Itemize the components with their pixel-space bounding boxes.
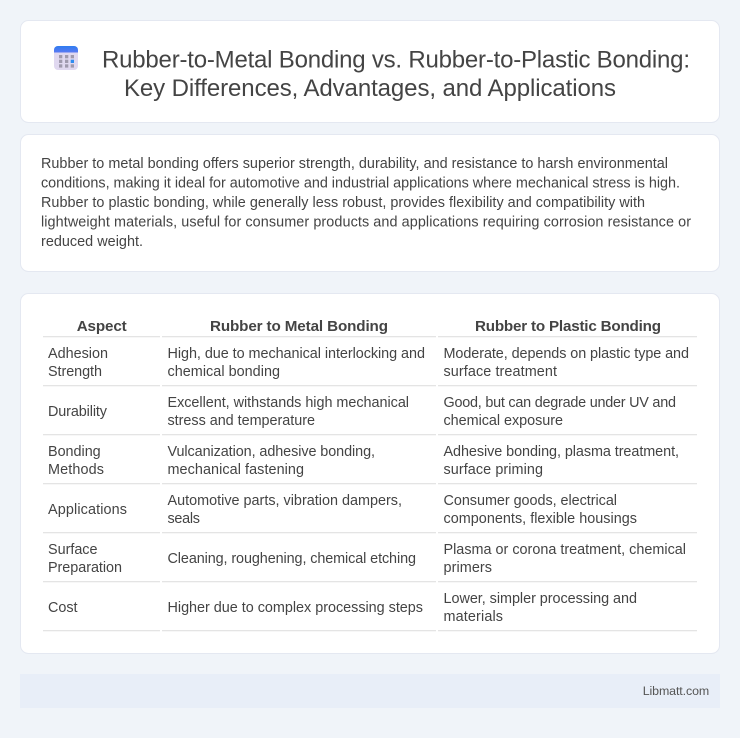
row: bonding methods — [48, 444, 679, 478]
title: Key Differences, Advantages, and Applications — [124, 75, 616, 102]
table header — [77, 318, 661, 335]
row: adhesion strength: surface treatment — [444, 364, 557, 380]
footer credit: Libmatt.com — [643, 684, 709, 698]
row: cost: Cost — [48, 600, 78, 616]
row: bonding methods: Bonding — [48, 444, 101, 460]
row: bonding methods: surface priming — [444, 462, 543, 478]
row: surface preparation: Plasma or corona treatment, chemical — [444, 542, 686, 558]
row: applications: components, flexible housings — [444, 511, 637, 527]
table header: Rubber to Metal Bonding — [210, 318, 388, 335]
row: adhesion strength: chemical bonding — [168, 364, 280, 380]
row: durability: chemical exposure — [444, 413, 563, 429]
row: applications: Automotive parts, vibration dampers, — [168, 493, 402, 509]
intro panel — [20, 134, 720, 272]
row: durability: Durability — [48, 404, 108, 420]
intro text: Rubber to metal bonding offers superior strength, durability, and resistance to harsh environmental — [41, 156, 668, 172]
row: adhesion strength: Strength — [48, 364, 102, 380]
intro text: reduced weight. — [41, 234, 143, 250]
intro text — [41, 156, 691, 250]
row: surface preparation: Surface — [48, 542, 98, 558]
title: Rubber-to-Metal Bonding vs. Rubber-to-Plastic Bonding: — [102, 46, 690, 74]
footer — [20, 674, 720, 708]
intro text: conditions, making it ideal for automotive and industrial applications where mechanical stress is high. — [41, 176, 680, 192]
row: applications: Consumer goods, electrical — [444, 493, 617, 509]
table header: Rubber to Plastic Bonding — [475, 318, 661, 335]
title — [102, 46, 690, 102]
row: cost: Higher due to complex processing steps — [168, 600, 423, 616]
row: applications: Applications — [48, 502, 127, 518]
row: cost: Lower, simpler processing and — [444, 591, 637, 607]
row: bonding methods: mechanical fastening — [168, 462, 304, 478]
comparison table panel — [20, 294, 720, 654]
row: bonding methods: Adhesive bonding, plasma treatment, — [444, 444, 679, 460]
row: surface preparation: primers — [444, 560, 492, 576]
row: durability: Excellent, withstands high mechanical — [168, 395, 409, 411]
row: adhesion strength: High, due to mechanical interlocking and — [168, 346, 425, 362]
icon: calendar — [54, 46, 78, 70]
row: durability: stress and temperature — [168, 413, 315, 429]
row: durability — [48, 395, 676, 429]
intro text: lightweight materials, useful for consumer products and applications requiring corrosion resistance or — [41, 214, 691, 230]
row: applications — [48, 493, 637, 527]
row: bonding methods: Vulcanization, adhesive bonding, — [168, 444, 375, 460]
row: surface preparation: Cleaning, roughening, chemical etching — [168, 551, 416, 567]
row: adhesion strength: Moderate, depends on plastic type and — [444, 346, 689, 362]
row: surface preparation — [48, 542, 686, 576]
header panel — [20, 20, 720, 122]
intro text: Rubber to plastic bonding, while generally less robust, provides flexibility and compatibility with — [41, 195, 645, 211]
row: surface preparation: Preparation — [48, 560, 122, 576]
row: applications: seals — [168, 511, 200, 527]
row: adhesion strength — [48, 346, 689, 380]
row: bonding methods: Methods — [48, 462, 104, 478]
table header: Aspect — [77, 318, 127, 335]
row: adhesion strength: Adhesion — [48, 346, 108, 362]
row: cost — [48, 591, 637, 625]
row: durability: Good, but can degrade under UV and — [444, 395, 676, 411]
row: cost: materials — [444, 609, 503, 625]
